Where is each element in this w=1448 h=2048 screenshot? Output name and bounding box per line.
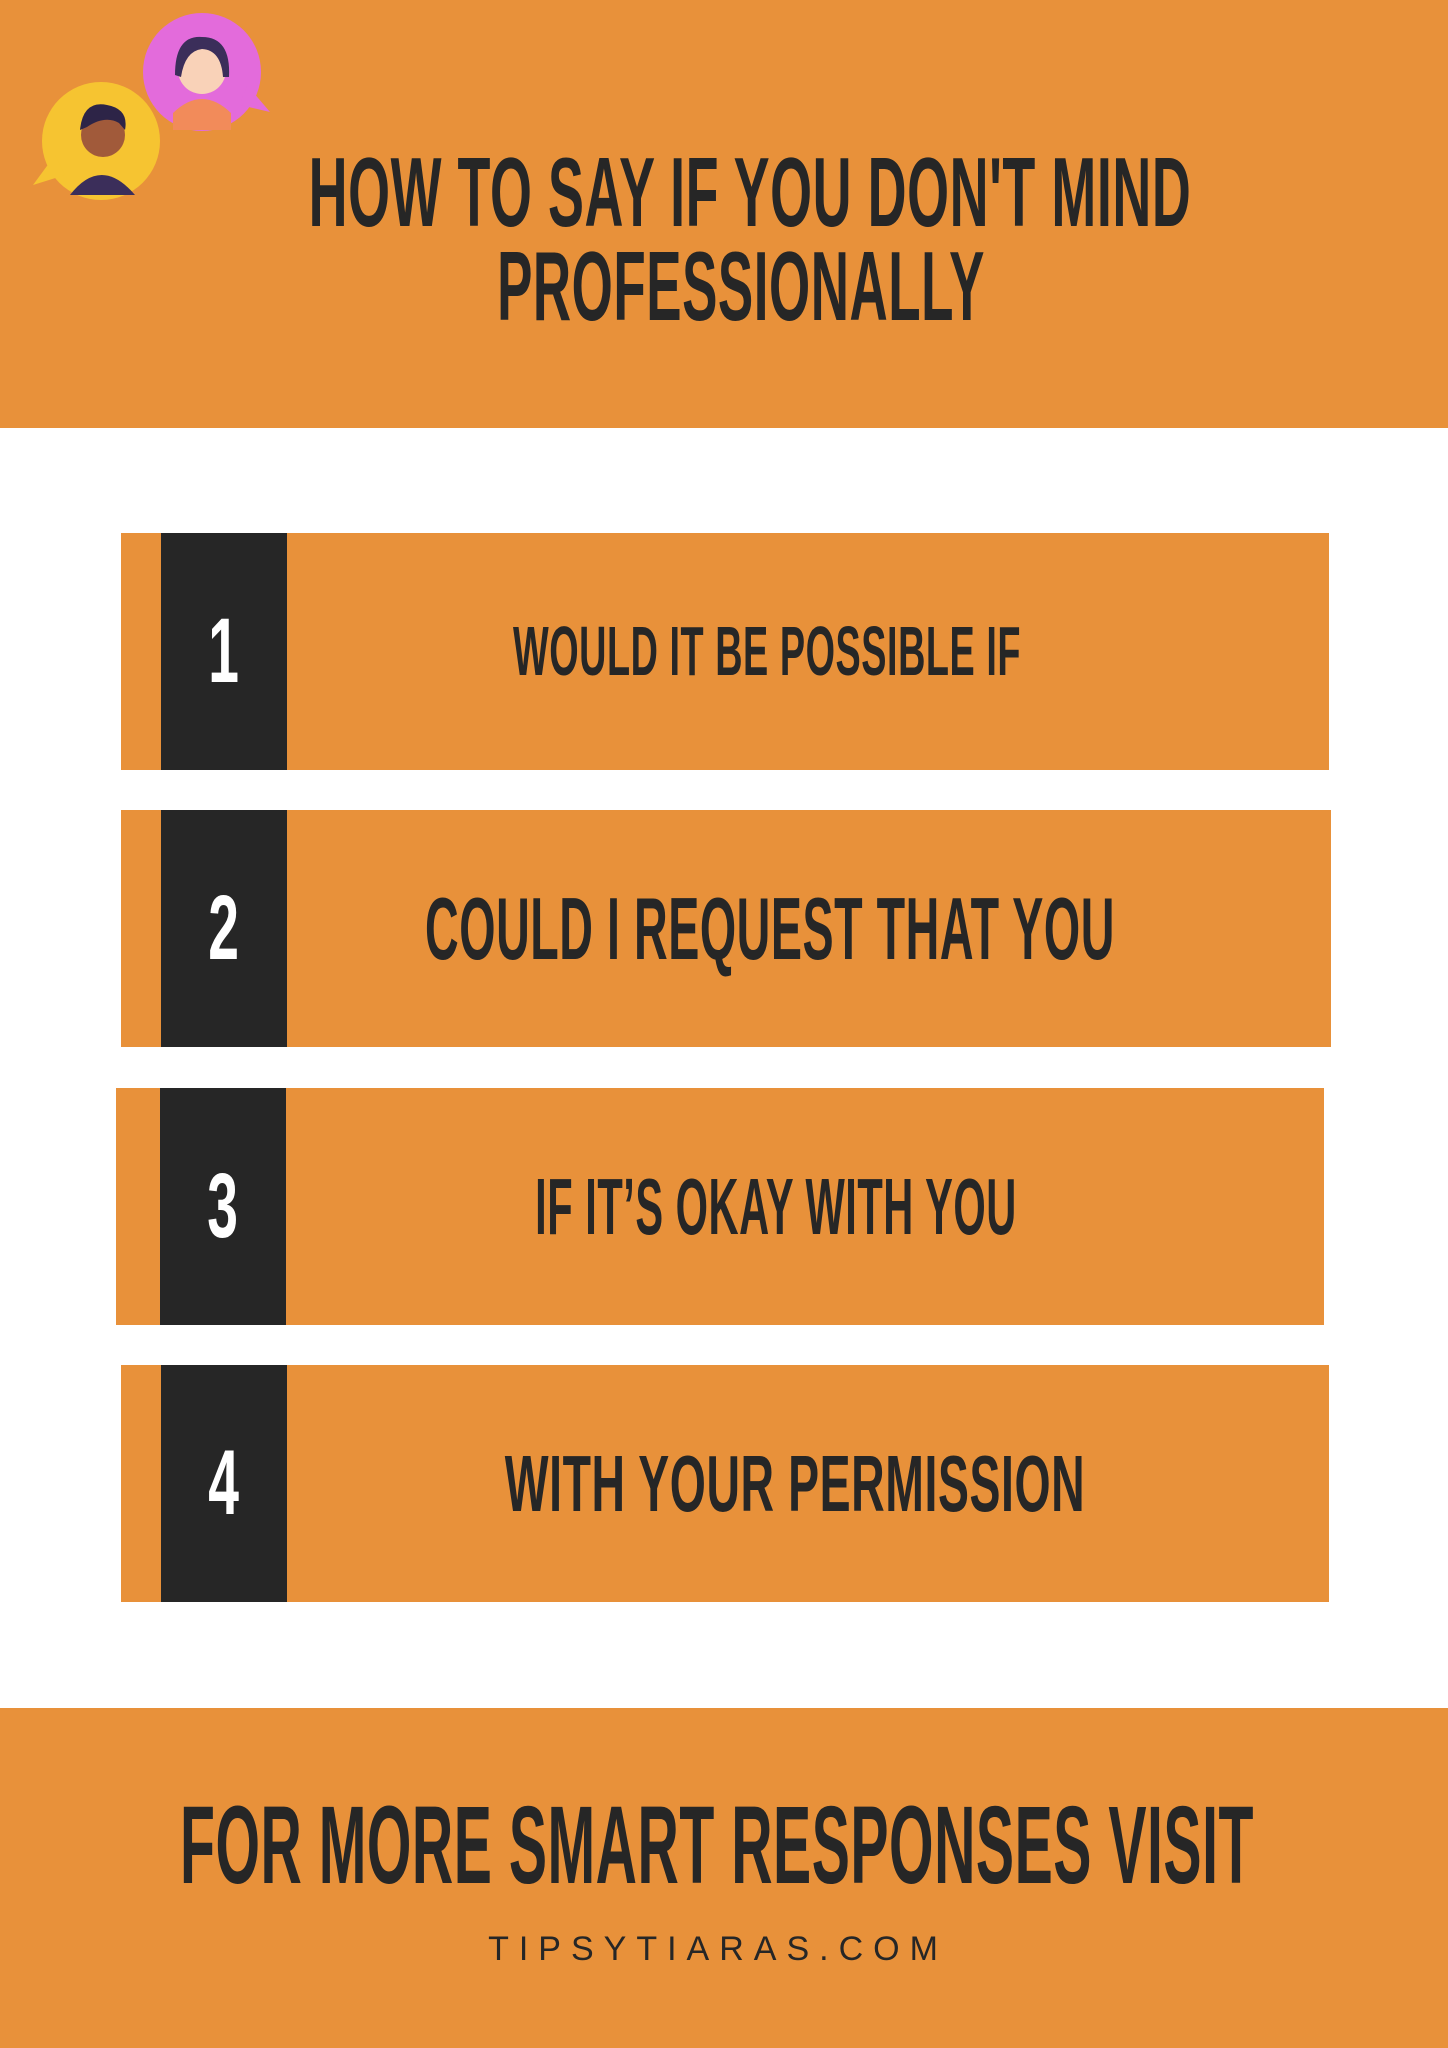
item 3 — [116, 1088, 1324, 1325]
item 4 — [121, 1365, 1329, 1602]
icon: avatars — [33, 13, 270, 200]
footer url: TIPSYTIARAS.COM — [488, 1930, 948, 1968]
footer band: FOR MORE SMART RESPONSES VISIT — [180, 1784, 1254, 1907]
item 2: COULD I REQUEST THAT YOU — [425, 879, 1115, 978]
item 1 — [121, 533, 1329, 770]
item 3: 3 — [208, 1155, 238, 1257]
item 3: IF IT’S OKAY WITH YOU — [535, 1162, 1017, 1251]
title: HOW TO SAY IF YOU DON'T MIND — [309, 137, 1191, 247]
item 4: WITH YOUR PERMISSION — [505, 1439, 1085, 1528]
header band — [0, 0, 1448, 428]
footer band — [0, 1708, 1448, 2048]
title: PROFESSIONALLY — [497, 231, 985, 341]
title — [309, 137, 1191, 341]
item 4: 4 — [209, 1432, 239, 1534]
item 2: 2 — [209, 877, 239, 979]
item 2 — [121, 810, 1331, 1047]
item 1: WOULD IT BE POSSIBLE IF — [513, 612, 1021, 690]
item 1: 1 — [209, 600, 239, 702]
